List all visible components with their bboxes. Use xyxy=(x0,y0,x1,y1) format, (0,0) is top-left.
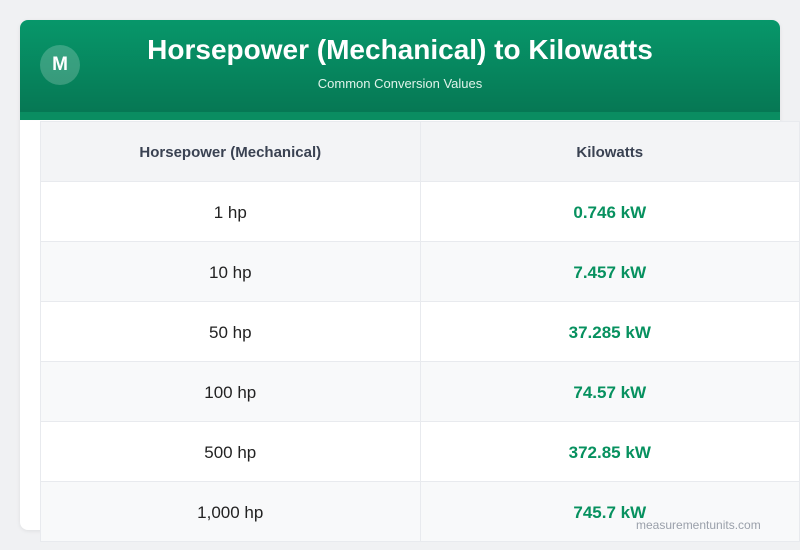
title: Horsepower (Mechanical) to Kilowatts xyxy=(147,34,653,65)
conversion table: 50 hp xyxy=(209,322,252,342)
conversion table: 500 hp xyxy=(204,442,256,462)
watermark: measurementunits.com xyxy=(636,518,761,532)
icon: logo M: M xyxy=(52,54,68,75)
icon: logo M xyxy=(40,45,80,85)
conversion table: 37.285 kW xyxy=(569,322,651,342)
conversion table: 1 hp xyxy=(214,202,247,222)
conversion table: 100 hp xyxy=(204,382,256,402)
conversion table: 1,000 hp xyxy=(197,502,263,522)
header banner xyxy=(20,20,780,120)
conversion table: 10 hp xyxy=(209,262,252,282)
conversion table: 372.85 kW xyxy=(569,442,651,462)
conversion table: Kilowatts xyxy=(576,144,643,161)
conversion table: 0.746 kW xyxy=(573,202,646,222)
conversion table: 7.457 kW xyxy=(573,262,646,282)
conversion table: Horsepower (Mechanical) xyxy=(139,144,321,161)
conversion table xyxy=(40,121,799,534)
subtitle: Common Conversion Values xyxy=(318,76,482,91)
conversion table: 745.7 kW xyxy=(573,502,646,522)
conversion table: 74.57 kW xyxy=(573,382,646,402)
